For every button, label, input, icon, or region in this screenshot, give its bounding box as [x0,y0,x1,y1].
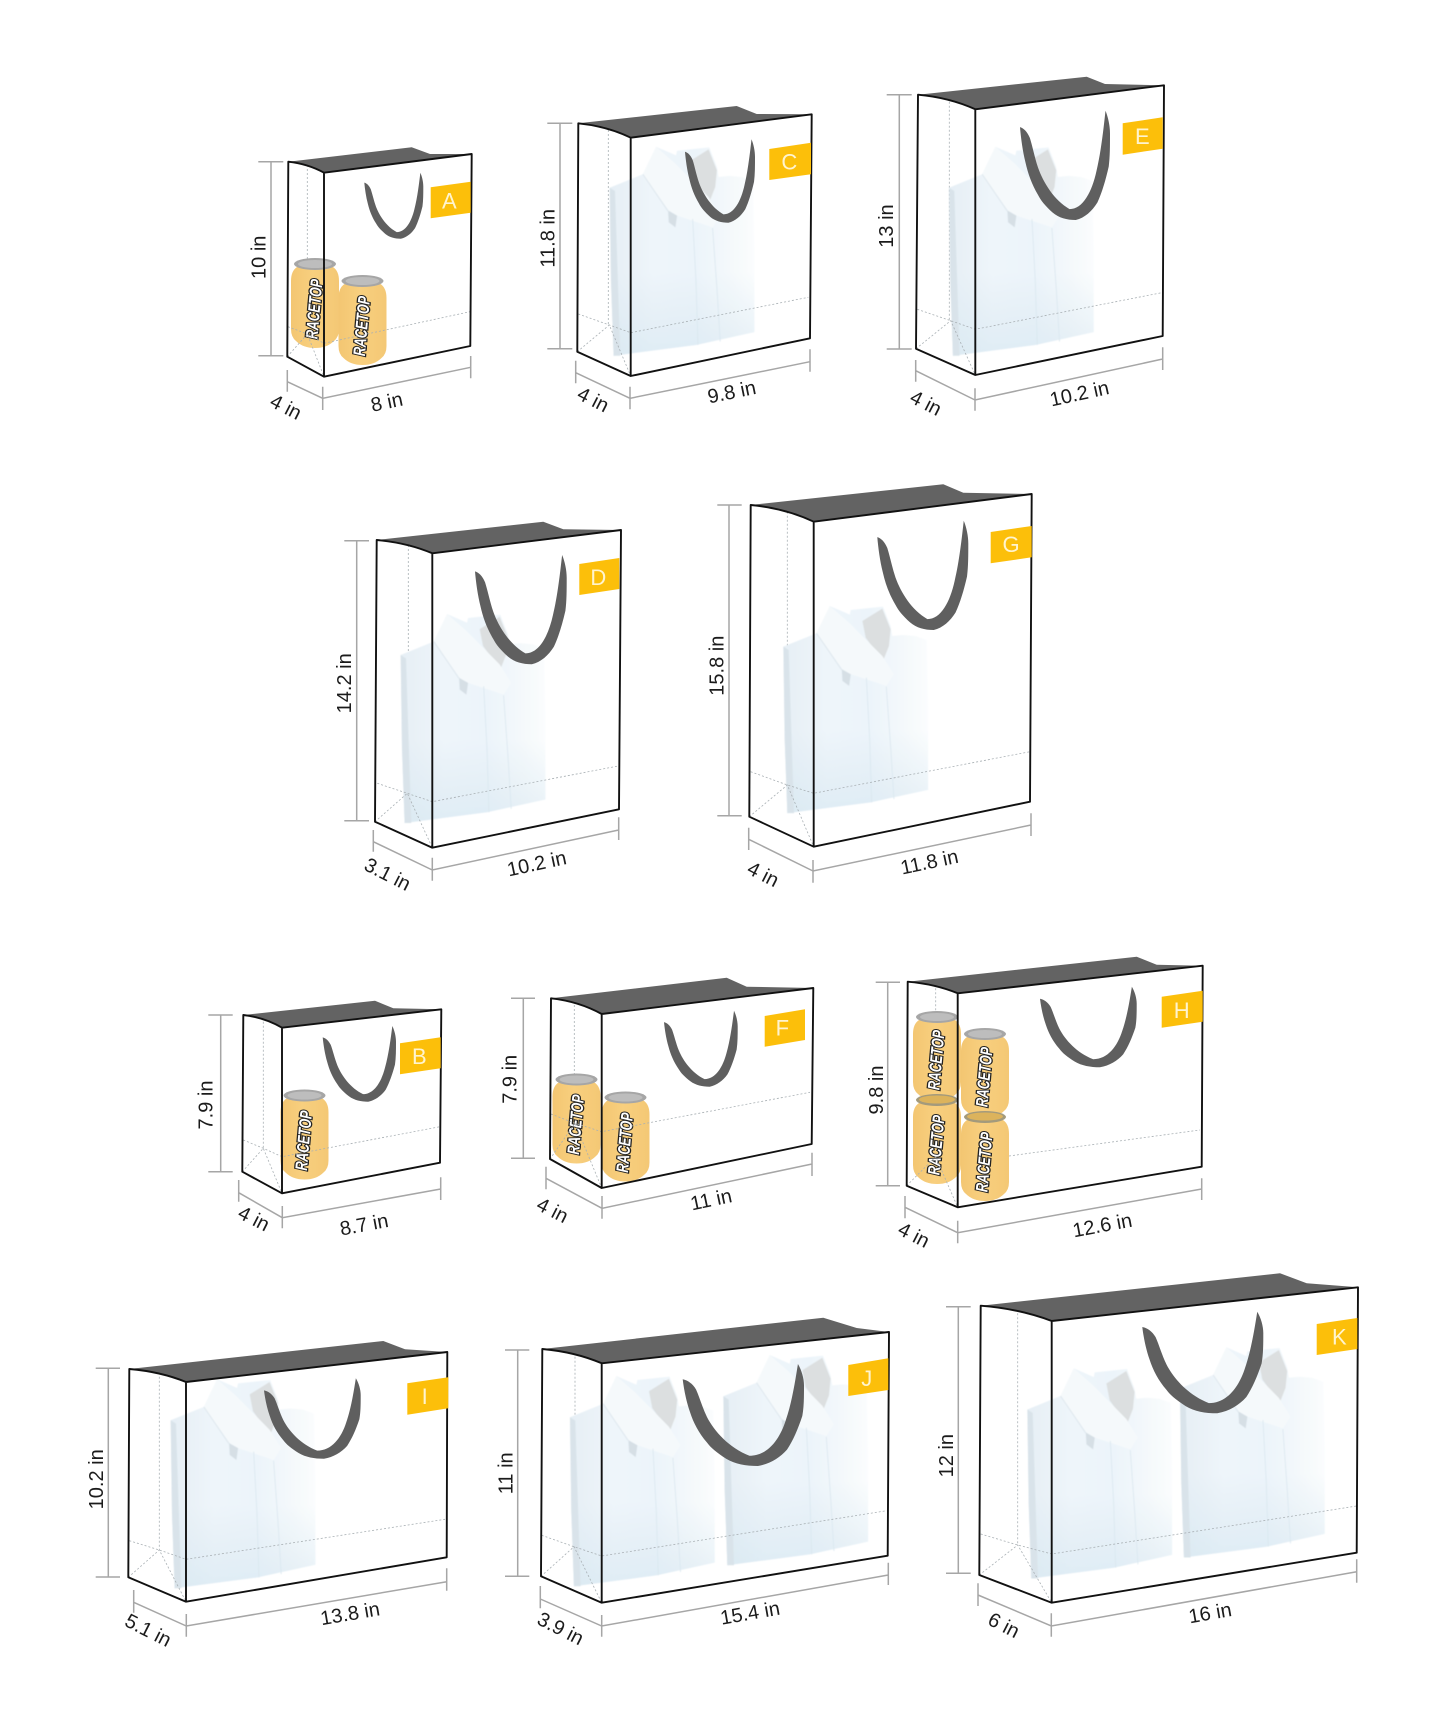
dimension lines [208,1015,441,1228]
depth label: 5.1 in [121,1610,175,1652]
height label: 15.8 in [707,636,729,696]
roof [918,77,1164,109]
depth label: 4 in [894,1218,933,1253]
width label: 16 in [1187,1599,1233,1628]
height label: 9.8 in [866,1066,888,1114]
roof [542,1318,889,1363]
handle [323,1026,396,1102]
bag outline [749,494,1032,847]
tag E [1123,117,1163,155]
width label: 11.8 in [899,846,960,879]
width label: 8 in [369,389,405,417]
depth label: 3.9 in [533,1608,587,1650]
tag A: A [442,188,457,214]
handle [877,521,968,630]
depth label: 6 in [984,1609,1023,1643]
height label: 11.8 in [537,209,559,268]
bag outline [287,154,472,377]
roof [377,522,621,553]
cans: RACETOP [924,1029,949,1091]
dimension lines [511,998,812,1219]
cans: RACETOP [924,1114,949,1176]
tag B [400,1037,441,1074]
handle [685,139,755,223]
shirt [783,606,928,813]
bag outline [375,530,621,848]
handle [1040,987,1137,1067]
bag K [936,1273,1358,1643]
cans: RACETOP [972,1046,997,1108]
shirt [401,614,545,823]
depth label: 4 in [266,390,305,425]
depth label: 4 in [533,1194,572,1228]
tag I: I [422,1384,428,1409]
dimension lines [876,982,1202,1243]
dimension lines [547,123,810,409]
bag outline [242,1009,441,1193]
bag G [707,484,1032,892]
dimension lines [344,541,619,881]
tag D: D [590,565,606,590]
bag outline [907,966,1203,1207]
roof [551,978,813,1014]
tag B: B [412,1044,427,1069]
depth label: 4 in [573,383,612,417]
height label: 7.9 in [499,1055,521,1104]
height label: 11 in [495,1452,517,1494]
dimension lines [887,95,1163,411]
tag K [1317,1318,1357,1355]
width label: 13.8 in [319,1598,382,1630]
dimension lines [258,162,471,410]
cans: RACETOP [564,1093,588,1155]
bag outline [979,1287,1358,1603]
tag H [1162,991,1203,1028]
bag outline [550,988,813,1188]
height label: 13 in [876,204,898,248]
cans: RACETOP [613,1111,637,1173]
bag A [248,147,472,425]
roof [288,147,472,173]
tag E: E [1135,124,1150,149]
handle [264,1378,361,1459]
depth label: 4 in [906,386,945,421]
bag outline [577,114,812,376]
handle [475,555,567,664]
roof [908,957,1203,993]
depth label: 4 in [743,858,782,892]
roof [751,484,1032,522]
dimension lines [717,505,1031,883]
dimension lines [96,1368,447,1637]
bag F [499,978,813,1228]
depth label: 3.1 in [360,854,414,896]
tag A [431,182,471,218]
height label: 10.2 in [86,1449,108,1509]
width label: 12.6 in [1071,1210,1134,1242]
shirts [570,1355,868,1586]
cans: RACETOP [972,1131,997,1193]
width label: 11 in [688,1185,734,1215]
height label: 12 in [936,1434,958,1477]
bag outline [916,85,1164,375]
width label: 8.7 in [338,1210,390,1241]
tag C: C [781,150,797,174]
tag F: F [776,1016,789,1040]
cans [913,1011,1009,1201]
roof [578,106,812,138]
handle [1020,111,1110,220]
tag G [991,526,1032,563]
roof [129,1341,447,1382]
tag K: K [1332,1324,1347,1350]
width label: 9.8 in [706,377,758,408]
tag J: J [861,1366,872,1391]
tag D [579,558,619,595]
can [280,1090,328,1180]
bag C [537,106,812,417]
bag outline [541,1332,889,1603]
cans: RACETOP [302,278,327,340]
dimension lines [946,1307,1357,1637]
shirt [610,147,754,356]
width label: 10.2 in [1048,377,1111,411]
bag D [334,522,621,896]
tag F [765,1009,805,1047]
bag I [86,1341,448,1652]
cans [552,1074,650,1182]
shirt [171,1379,315,1588]
can: RACETOP [292,1109,316,1171]
bag B [195,1001,441,1241]
tag C [769,143,811,180]
cans: RACETOP [350,295,374,357]
cans [291,258,386,365]
bag J [495,1318,889,1650]
height label: 7.9 in [195,1081,217,1129]
tag I [407,1377,448,1415]
tag H: H [1174,998,1190,1023]
handle [1142,1312,1263,1413]
bag E [876,77,1164,421]
handle [664,1011,738,1087]
bag H [866,957,1203,1253]
width label: 15.4 in [719,1598,782,1630]
roof [981,1273,1358,1321]
dimension lines [505,1350,888,1637]
height label: 10 in [248,236,270,279]
height label: 14.2 in [334,653,356,713]
tag J [848,1358,888,1396]
shirts [1027,1347,1325,1579]
shirt [949,147,1094,356]
handle [364,173,423,239]
depth label: 4 in [234,1202,273,1236]
roof [243,1001,441,1028]
handle [683,1364,804,1466]
tag G: G [1002,532,1020,557]
bag outline [128,1352,447,1602]
width label: 10.2 in [505,847,569,881]
